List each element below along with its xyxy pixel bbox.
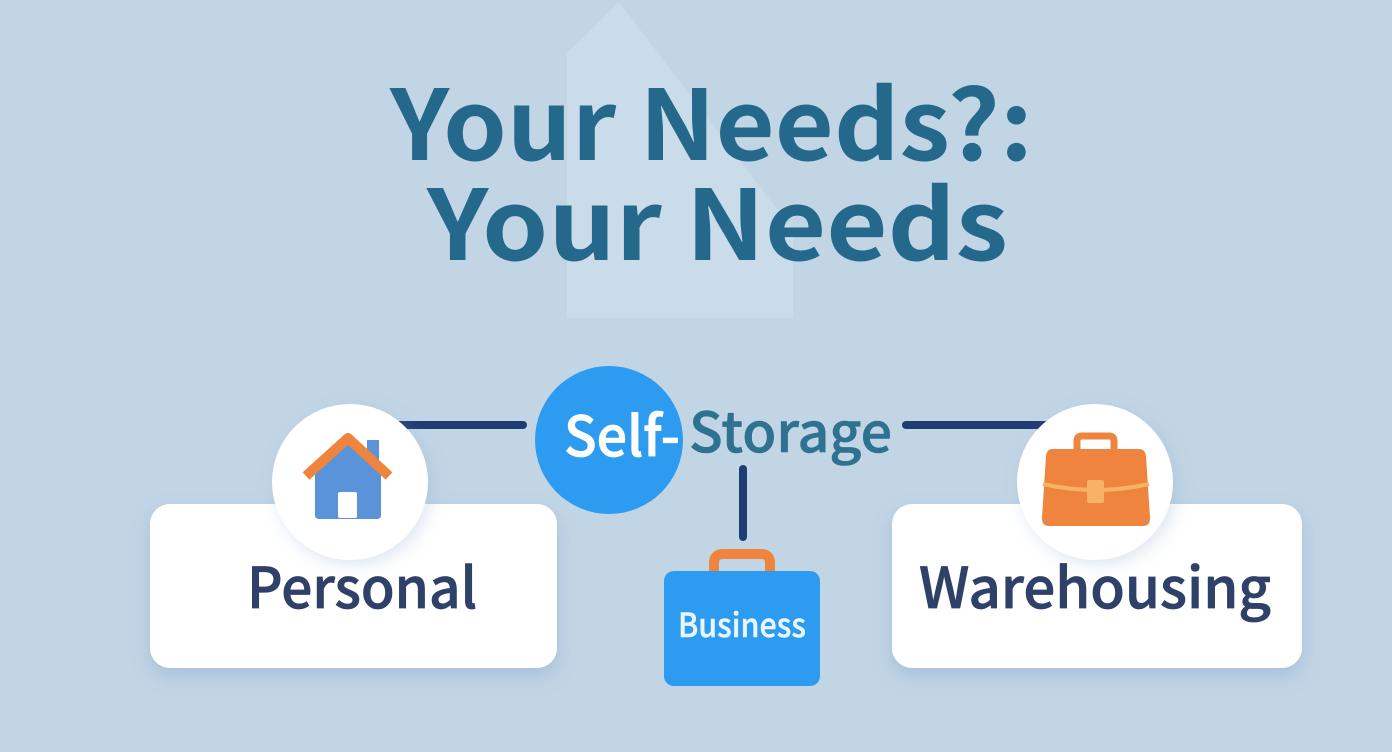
icon circle: Warehousing [1017, 404, 1173, 560]
title: Your Needs [426, 147, 1008, 288]
label: Warehousing: Warehousing [919, 544, 1271, 625]
title: Your Needs?: [389, 47, 1033, 188]
icon: briefcase [1042, 436, 1150, 526]
panel: Personal [150, 404, 557, 668]
panel: Warehousing [892, 404, 1302, 668]
title [389, 47, 1033, 288]
label: Business: Business [678, 599, 806, 647]
connector: right [902, 421, 1050, 429]
connector: centre [739, 465, 747, 541]
connector: left [395, 421, 527, 429]
panel: Business [664, 554, 820, 686]
icon: case handle [714, 554, 770, 573]
icon circle: Personal [272, 404, 428, 560]
background house shape [567, 2, 793, 318]
central node: Self-Storage [535, 366, 892, 514]
label: Personal: Personal [247, 544, 477, 625]
icon: house [306, 438, 389, 519]
central node: Self-Storage: Storage [689, 388, 892, 468]
central node: Self-Storage: Self- [564, 392, 680, 472]
